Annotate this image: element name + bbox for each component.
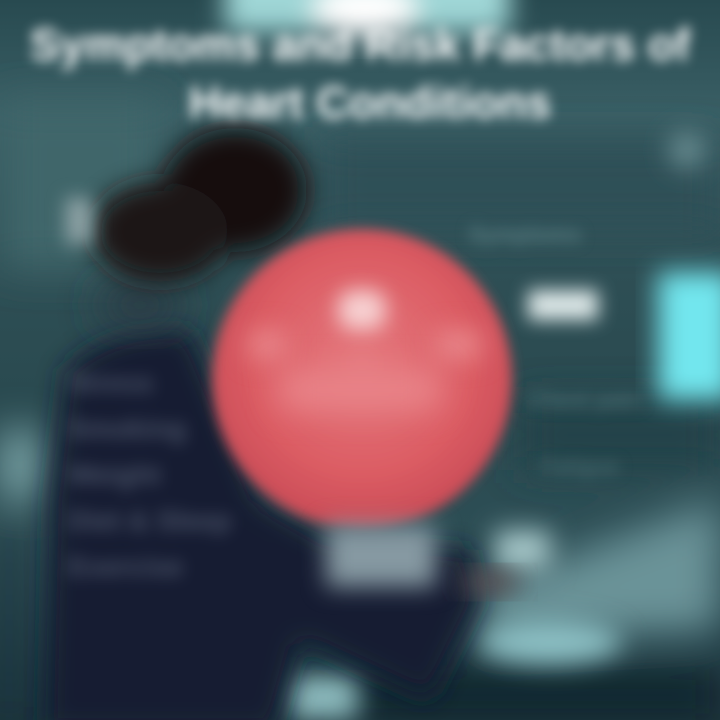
right label 3: Chest pain (529, 387, 641, 412)
title: Symptoms and Risk Factors of (30, 19, 690, 70)
floor highlights (288, 132, 705, 720)
left text list (65, 367, 233, 582)
right label 2 (528, 290, 598, 320)
person hair (92, 128, 307, 282)
ceiling light (225, 0, 510, 36)
bottom hand label (326, 525, 436, 587)
person body (45, 330, 480, 720)
right label 1: Symptoms (469, 222, 581, 247)
hand (460, 570, 520, 594)
red balloon (212, 229, 512, 529)
left text list: Stress (68, 367, 154, 398)
right screen (658, 272, 720, 400)
left text list: Diet & Sleep (68, 505, 231, 536)
person neck (95, 283, 185, 327)
balloon label row (242, 322, 489, 368)
left text list: Weight (68, 459, 161, 490)
right label 4: Fatigue (541, 454, 619, 479)
balloon label top (338, 290, 386, 330)
balloon label lower (280, 372, 440, 408)
left text list: Smoking (68, 413, 186, 444)
person (45, 128, 520, 720)
subtitle: Heart Conditions (189, 77, 551, 128)
left badge (66, 198, 92, 244)
left text list: Exercise (68, 551, 183, 582)
